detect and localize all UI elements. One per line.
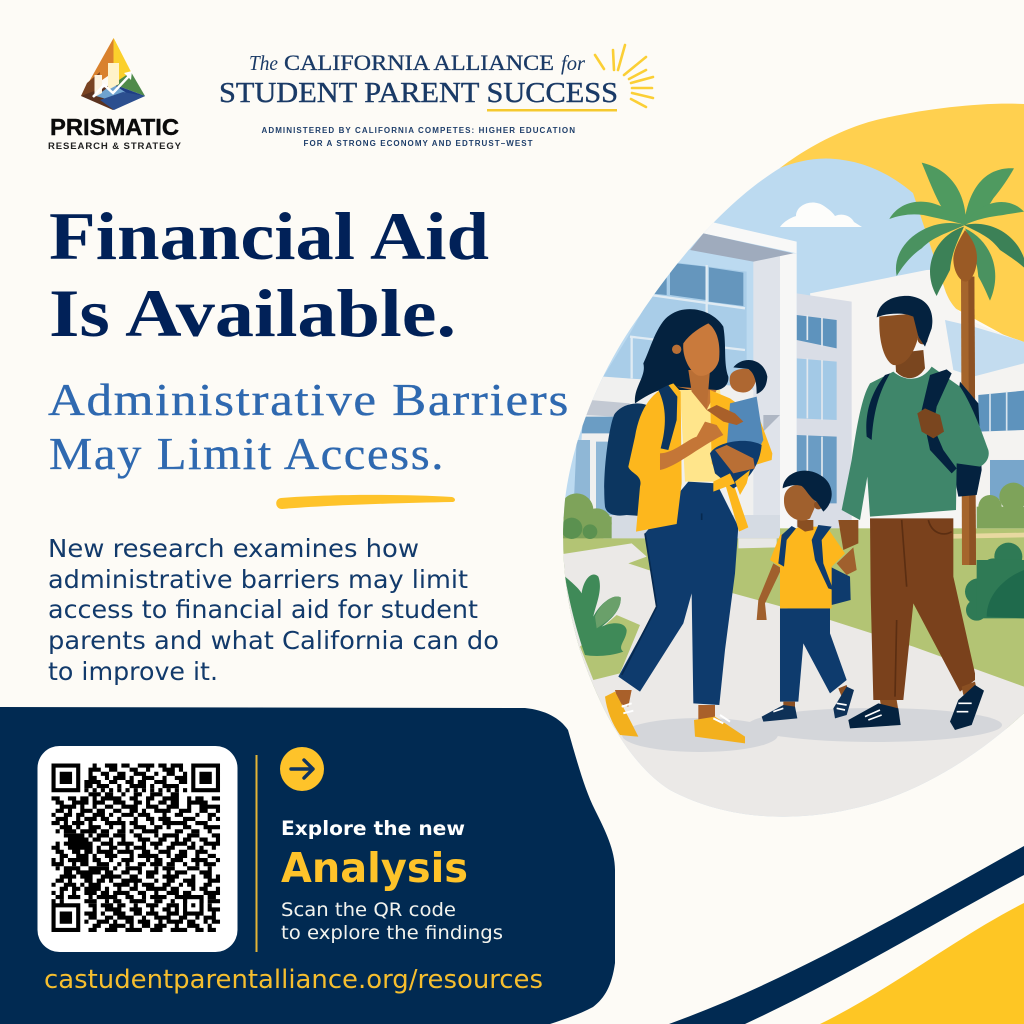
figure: man [838,296,989,730]
body text: parents and what California can do [48,626,499,655]
man neck [895,350,925,378]
shirt [680,390,720,482]
logo: California Alliance for Student Parent Success: CALIFORNIA ALLIANCE [284,50,554,75]
administrator line [262,126,575,148]
boy shoes [762,687,854,722]
strap [658,385,677,450]
boy legs [780,608,847,702]
boy straps [778,525,833,590]
body text: access to financial aid for student [48,595,478,624]
logo: California Alliance for Student Parent Success: STUDENT PARENT SUCCESS [219,78,618,109]
URL: castudentparentalliance.org/resources [44,965,543,995]
cloud [780,203,862,227]
ground and path [557,483,1024,827]
neck [688,370,710,410]
icon: arrow circle [280,747,324,791]
navy swoosh band [669,846,1024,1024]
foot shadows [622,708,1002,752]
QR code card [38,746,238,952]
logo: California Alliance for Student Parent Success: for [561,51,586,75]
man hand holding [838,520,858,550]
yellow corner [820,903,1024,1024]
body text: to improve it. [48,657,218,686]
sweater [842,367,989,520]
title: Financial Aid [49,198,489,274]
call to action text: Explore the new [281,817,465,840]
hand [715,445,755,473]
divider [256,755,258,952]
call to action text: to explore the findings [281,922,503,944]
man hand [917,408,944,438]
boy neck [797,520,813,532]
man backpack [950,382,982,497]
arm [660,422,723,470]
figure: woman carrying baby [604,309,772,743]
face [683,323,719,376]
title [49,198,489,351]
yellow underline swoosh [276,495,455,509]
administrator line: FOR A STRONG ECONOMY AND EDTRUST–WEST [304,139,533,148]
illustration: campus scene with family [550,150,1024,830]
body text: administrative barriers may limit [48,565,468,594]
body text [48,534,499,686]
title: Is Available. [49,275,456,351]
yellow background blob [780,104,1024,346]
shoes [605,692,745,743]
QR code [52,766,220,930]
body text: New research examines how [48,534,419,563]
man shoes [848,685,984,730]
call to action text [281,817,503,944]
backpack [604,403,650,517]
subtitle: Administrative Barriers [48,374,570,425]
boy shirt [770,527,845,608]
subtitle: May Limit Access. [49,428,445,479]
boy arm [757,563,782,620]
figure: boy [757,471,857,722]
baby [707,360,767,495]
bushes [560,483,1024,538]
palm tree [889,163,1024,565]
jacket [628,383,682,532]
call to action text: Analysis [281,844,468,892]
call to action text: Scan the QR code [281,899,456,921]
man face [879,313,918,365]
logo: California Alliance for Student Parent Success: The [249,51,278,75]
logo: California Alliance for Student Parent Success [219,45,653,112]
boy head [784,485,817,521]
logo: Prismatic [48,38,182,152]
man legs [870,518,975,700]
boy backpack [830,567,851,605]
straps [866,373,890,440]
logo: Prismatic: RESEARCH & STRATEGY [48,141,182,152]
subtitle [48,374,570,479]
administrator line: ADMINISTERED BY CALIFORNIA COMPETES: HIGHER EDUCATION [262,126,575,135]
legs [618,482,738,705]
logo: Prismatic: PRISMATIC [50,114,179,140]
bottom navy panel [0,707,615,1024]
buildings [574,222,1024,528]
hair [635,309,728,403]
boy arm right [837,547,857,575]
